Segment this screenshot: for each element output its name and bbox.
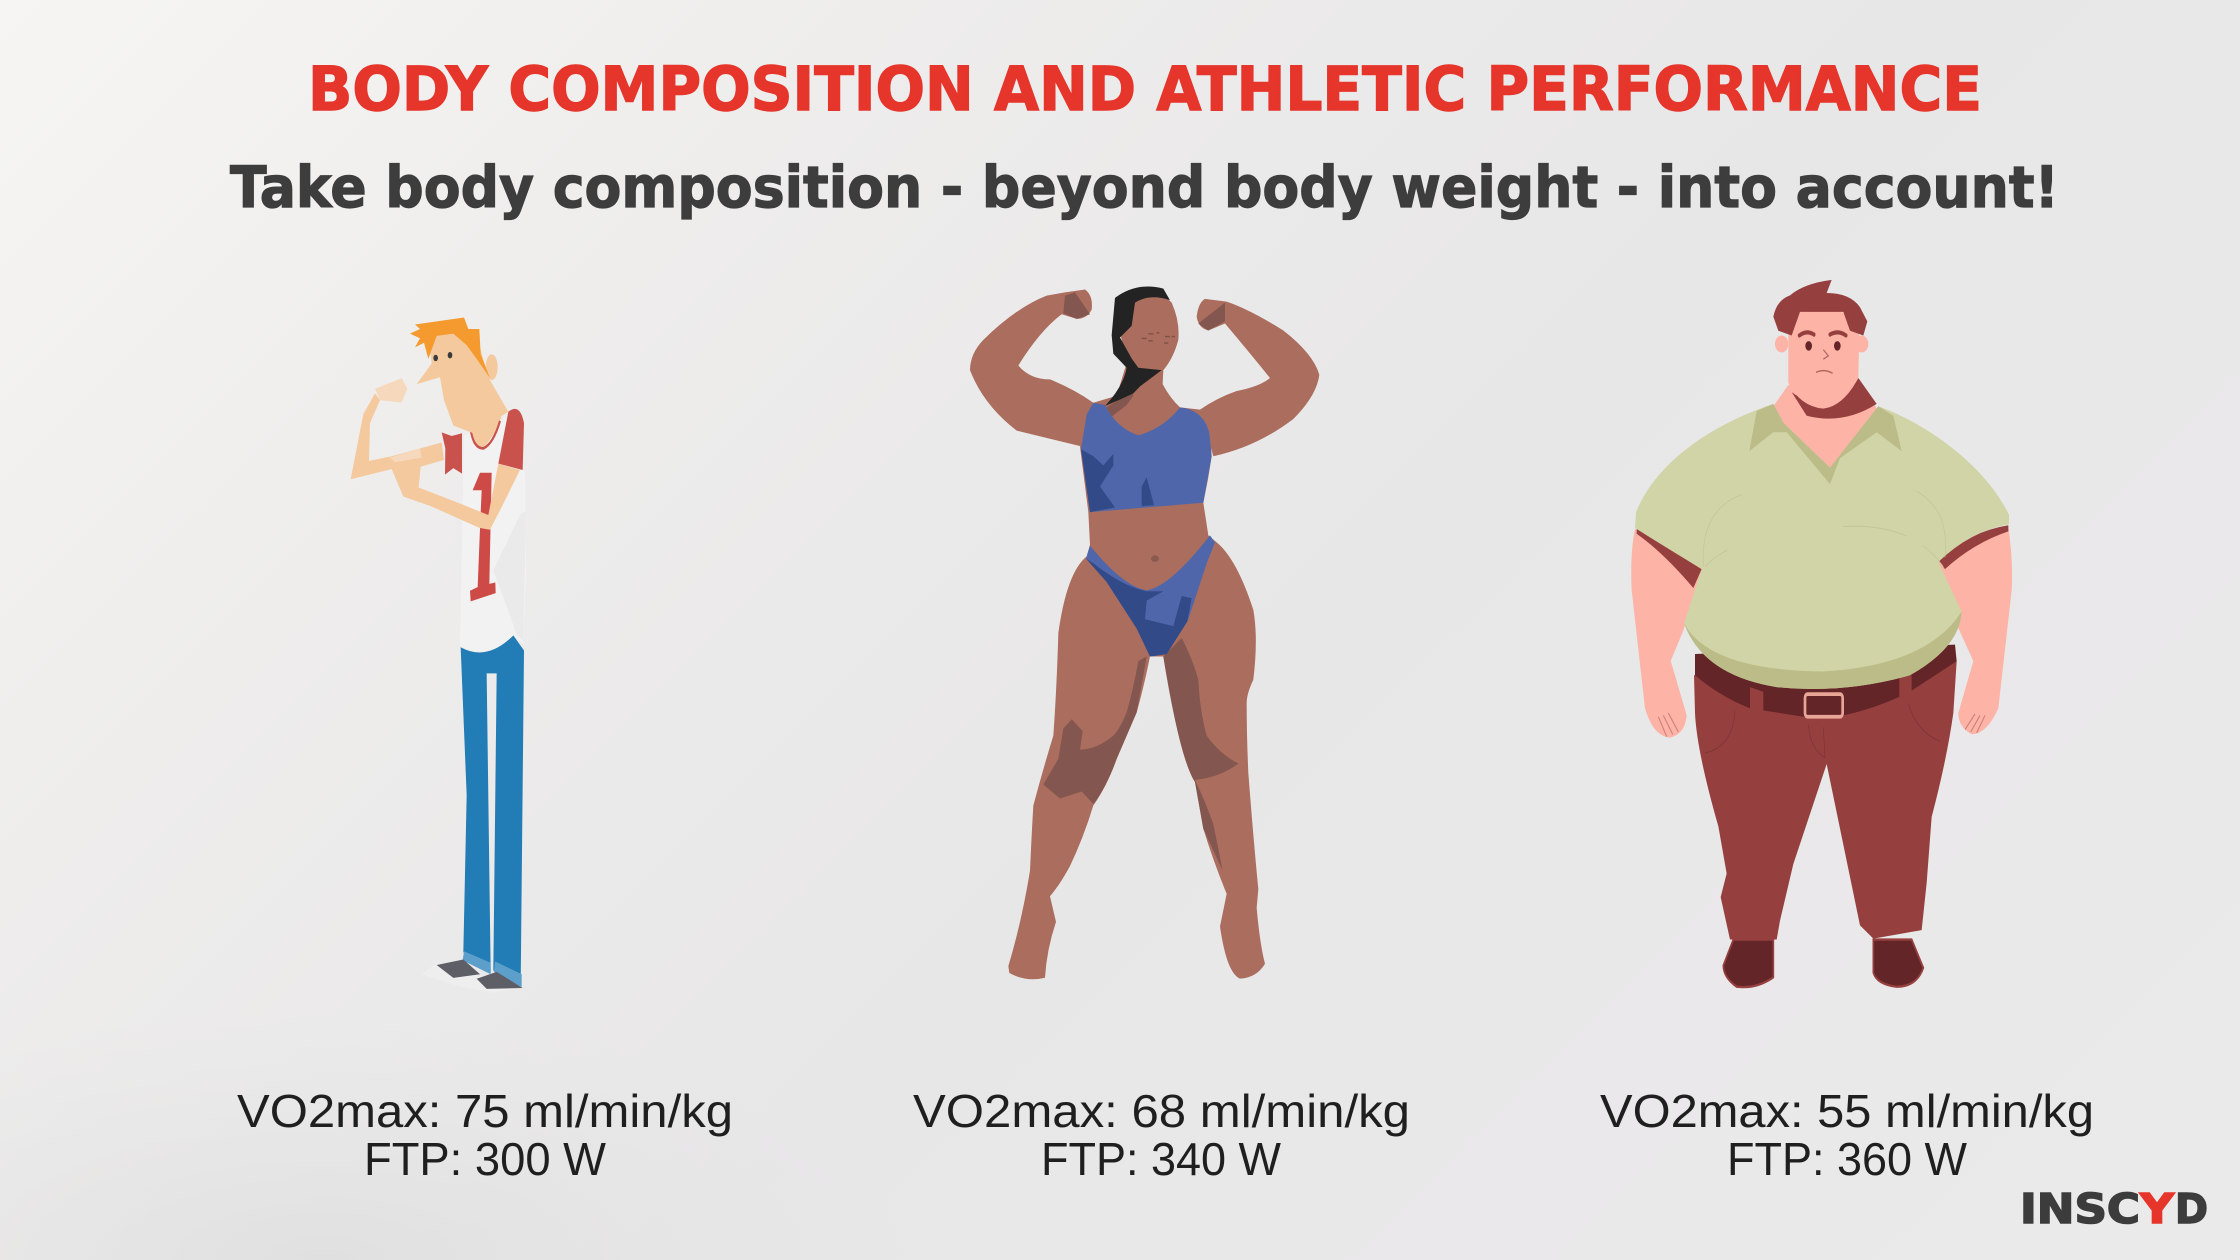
head: [417, 329, 508, 433]
collar: [1749, 404, 1902, 484]
pants: [461, 635, 524, 986]
inner sleeve shadows: [1637, 525, 2008, 588]
ear: [486, 354, 498, 380]
finger lines: [1658, 713, 1985, 737]
label: athlete 3 stats: [1600, 1085, 2094, 1185]
shirt: [1635, 404, 2009, 689]
bikini shading: [1086, 559, 1192, 656]
logo: INSCYD: D: [2175, 1185, 2208, 1233]
label: athlete 3 stats: VO2max: 55 ml/min/kg: [1600, 1085, 2094, 1137]
shirt shading: [493, 510, 526, 641]
fist: [375, 378, 407, 403]
label: athlete 1 stats: VO2max: 75 ml/min/kg: [237, 1085, 733, 1137]
bow tie: [442, 432, 462, 475]
face: [1799, 332, 1846, 373]
neck: [1773, 378, 1878, 468]
figure: muscular woman: [970, 287, 1319, 979]
eyes: [433, 352, 452, 361]
neck: [469, 416, 502, 448]
body silhouette: [970, 290, 1319, 979]
crop top shading: [1081, 449, 1154, 512]
logo: INSCYD: INSC: [2020, 1185, 2140, 1233]
number 1: [470, 473, 496, 601]
title: BODY COMPOSITION AND ATHLETIC PERFORMANCE: [308, 54, 1982, 125]
figure: overweight man: [1631, 280, 2012, 987]
shoes: [422, 960, 523, 993]
shoes: [1723, 940, 1923, 987]
label: athlete 3 stats: FTP: 360 W: [1727, 1133, 1968, 1185]
label: athlete 2 stats: FTP: 340 W: [1041, 1133, 1282, 1185]
logo: INSCYD: [2020, 1185, 2208, 1233]
pants: [1694, 661, 1957, 940]
crop top: [1081, 403, 1212, 512]
ears: [1775, 336, 1868, 352]
hair: [1773, 280, 1867, 336]
shadows on skin: [1043, 292, 1238, 871]
label: athlete 2 stats: VO2max: 68 ml/min/kg: [913, 1085, 1410, 1137]
hair: [410, 318, 490, 378]
arms: [1631, 527, 2012, 738]
buckle: [1805, 694, 1843, 717]
subtitle: Take body composition - beyond body weight - into account!: [230, 155, 2059, 221]
collar: [471, 421, 500, 448]
belt: [1695, 645, 1957, 717]
label: athlete 2 stats: [913, 1085, 1410, 1185]
shirt folds: [1703, 491, 1946, 567]
belt loops: [1750, 675, 1912, 713]
freckles: [1142, 333, 1175, 343]
sleeve: [498, 409, 524, 470]
pant cuffs: [463, 951, 522, 987]
navel: [1151, 555, 1159, 562]
arms: [351, 393, 520, 530]
pants seams: [1705, 704, 1940, 758]
logo: INSCYD: Y: [2139, 1185, 2175, 1233]
figure: skinny athlete: [351, 318, 526, 993]
bikini bottom: [1086, 535, 1215, 656]
shirt hem shade: [1684, 612, 1962, 689]
hand: [390, 448, 422, 462]
shirt: [460, 415, 526, 652]
neck fold: [1792, 378, 1877, 419]
label: athlete 1 stats: FTP: 300 W: [364, 1133, 607, 1185]
hair: [1105, 287, 1170, 406]
head: [1788, 309, 1859, 409]
label: athlete 1 stats: [237, 1085, 733, 1185]
